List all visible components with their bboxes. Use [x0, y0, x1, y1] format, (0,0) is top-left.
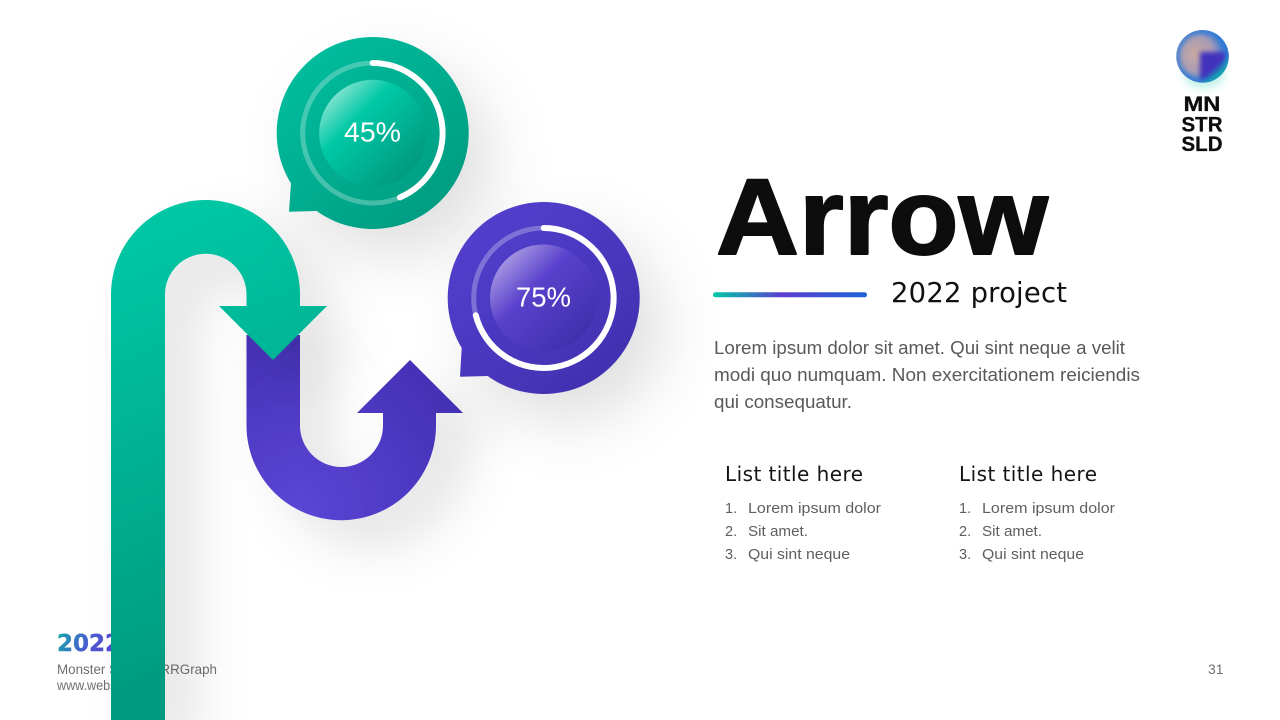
body text: modi quo numquam. Non exercitationem reiciendis — [714, 365, 1140, 385]
list items: 1. — [725, 501, 737, 517]
list items: Lorem ipsum dolor — [748, 501, 881, 517]
bubble: 45 percent — [277, 37, 469, 229]
subtitle: 2022 project — [891, 278, 1067, 309]
title: Arrow — [716, 156, 1049, 277]
logo wordmark — [1182, 93, 1222, 156]
logo sphere — [1176, 30, 1229, 86]
list items: 3. — [725, 547, 737, 563]
page number: 31 — [1208, 661, 1224, 677]
logo — [1176, 30, 1229, 156]
bubble body green — [277, 37, 469, 229]
list items: Sit amet. — [748, 524, 808, 540]
value: 45% — [344, 117, 401, 148]
list items — [959, 501, 1115, 563]
footer — [56, 631, 217, 693]
list title: List title here — [725, 462, 863, 486]
list items: Qui sint neque — [982, 547, 1084, 563]
list items — [725, 501, 881, 563]
inner disc — [319, 80, 426, 187]
list items: 2. — [725, 524, 737, 540]
progress track — [474, 228, 614, 368]
footer credit: Monster Slide by RRGraph — [57, 662, 217, 677]
logo wordmark: MN — [1184, 93, 1220, 116]
logo glow — [1184, 60, 1224, 88]
gradient rule — [713, 292, 867, 297]
body text: Lorem ipsum dolor sit amet. Qui sint neque a velit — [714, 338, 1125, 358]
value: 75% — [516, 282, 571, 313]
arrow: purple u-turn — [246, 335, 463, 520]
list items: 2. — [959, 524, 971, 540]
arrow: green hook — [111, 200, 327, 720]
footer year: 2022 — [57, 631, 121, 657]
list items: Sit amet. — [982, 524, 1042, 540]
bubble: 75 percent — [448, 202, 640, 394]
logo wordmark: STR — [1182, 113, 1222, 136]
list title: List title here — [959, 462, 1097, 486]
list items: Lorem ipsum dolor — [982, 501, 1115, 517]
bubble body purple — [448, 202, 640, 394]
list items: 1. — [959, 501, 971, 517]
progress arc 45 — [373, 63, 443, 197]
inner disc — [490, 244, 597, 352]
list items: 3. — [959, 547, 971, 563]
list 2 — [959, 462, 1115, 563]
list items: Qui sint neque — [748, 547, 850, 563]
body text: qui consequatur. — [714, 392, 852, 412]
body text — [714, 338, 1140, 412]
list 1 — [725, 462, 881, 563]
footer website: www.website.com — [56, 678, 157, 693]
progress arc 75 — [476, 228, 614, 368]
logo wordmark: SLD — [1182, 133, 1222, 156]
progress track — [303, 63, 443, 203]
